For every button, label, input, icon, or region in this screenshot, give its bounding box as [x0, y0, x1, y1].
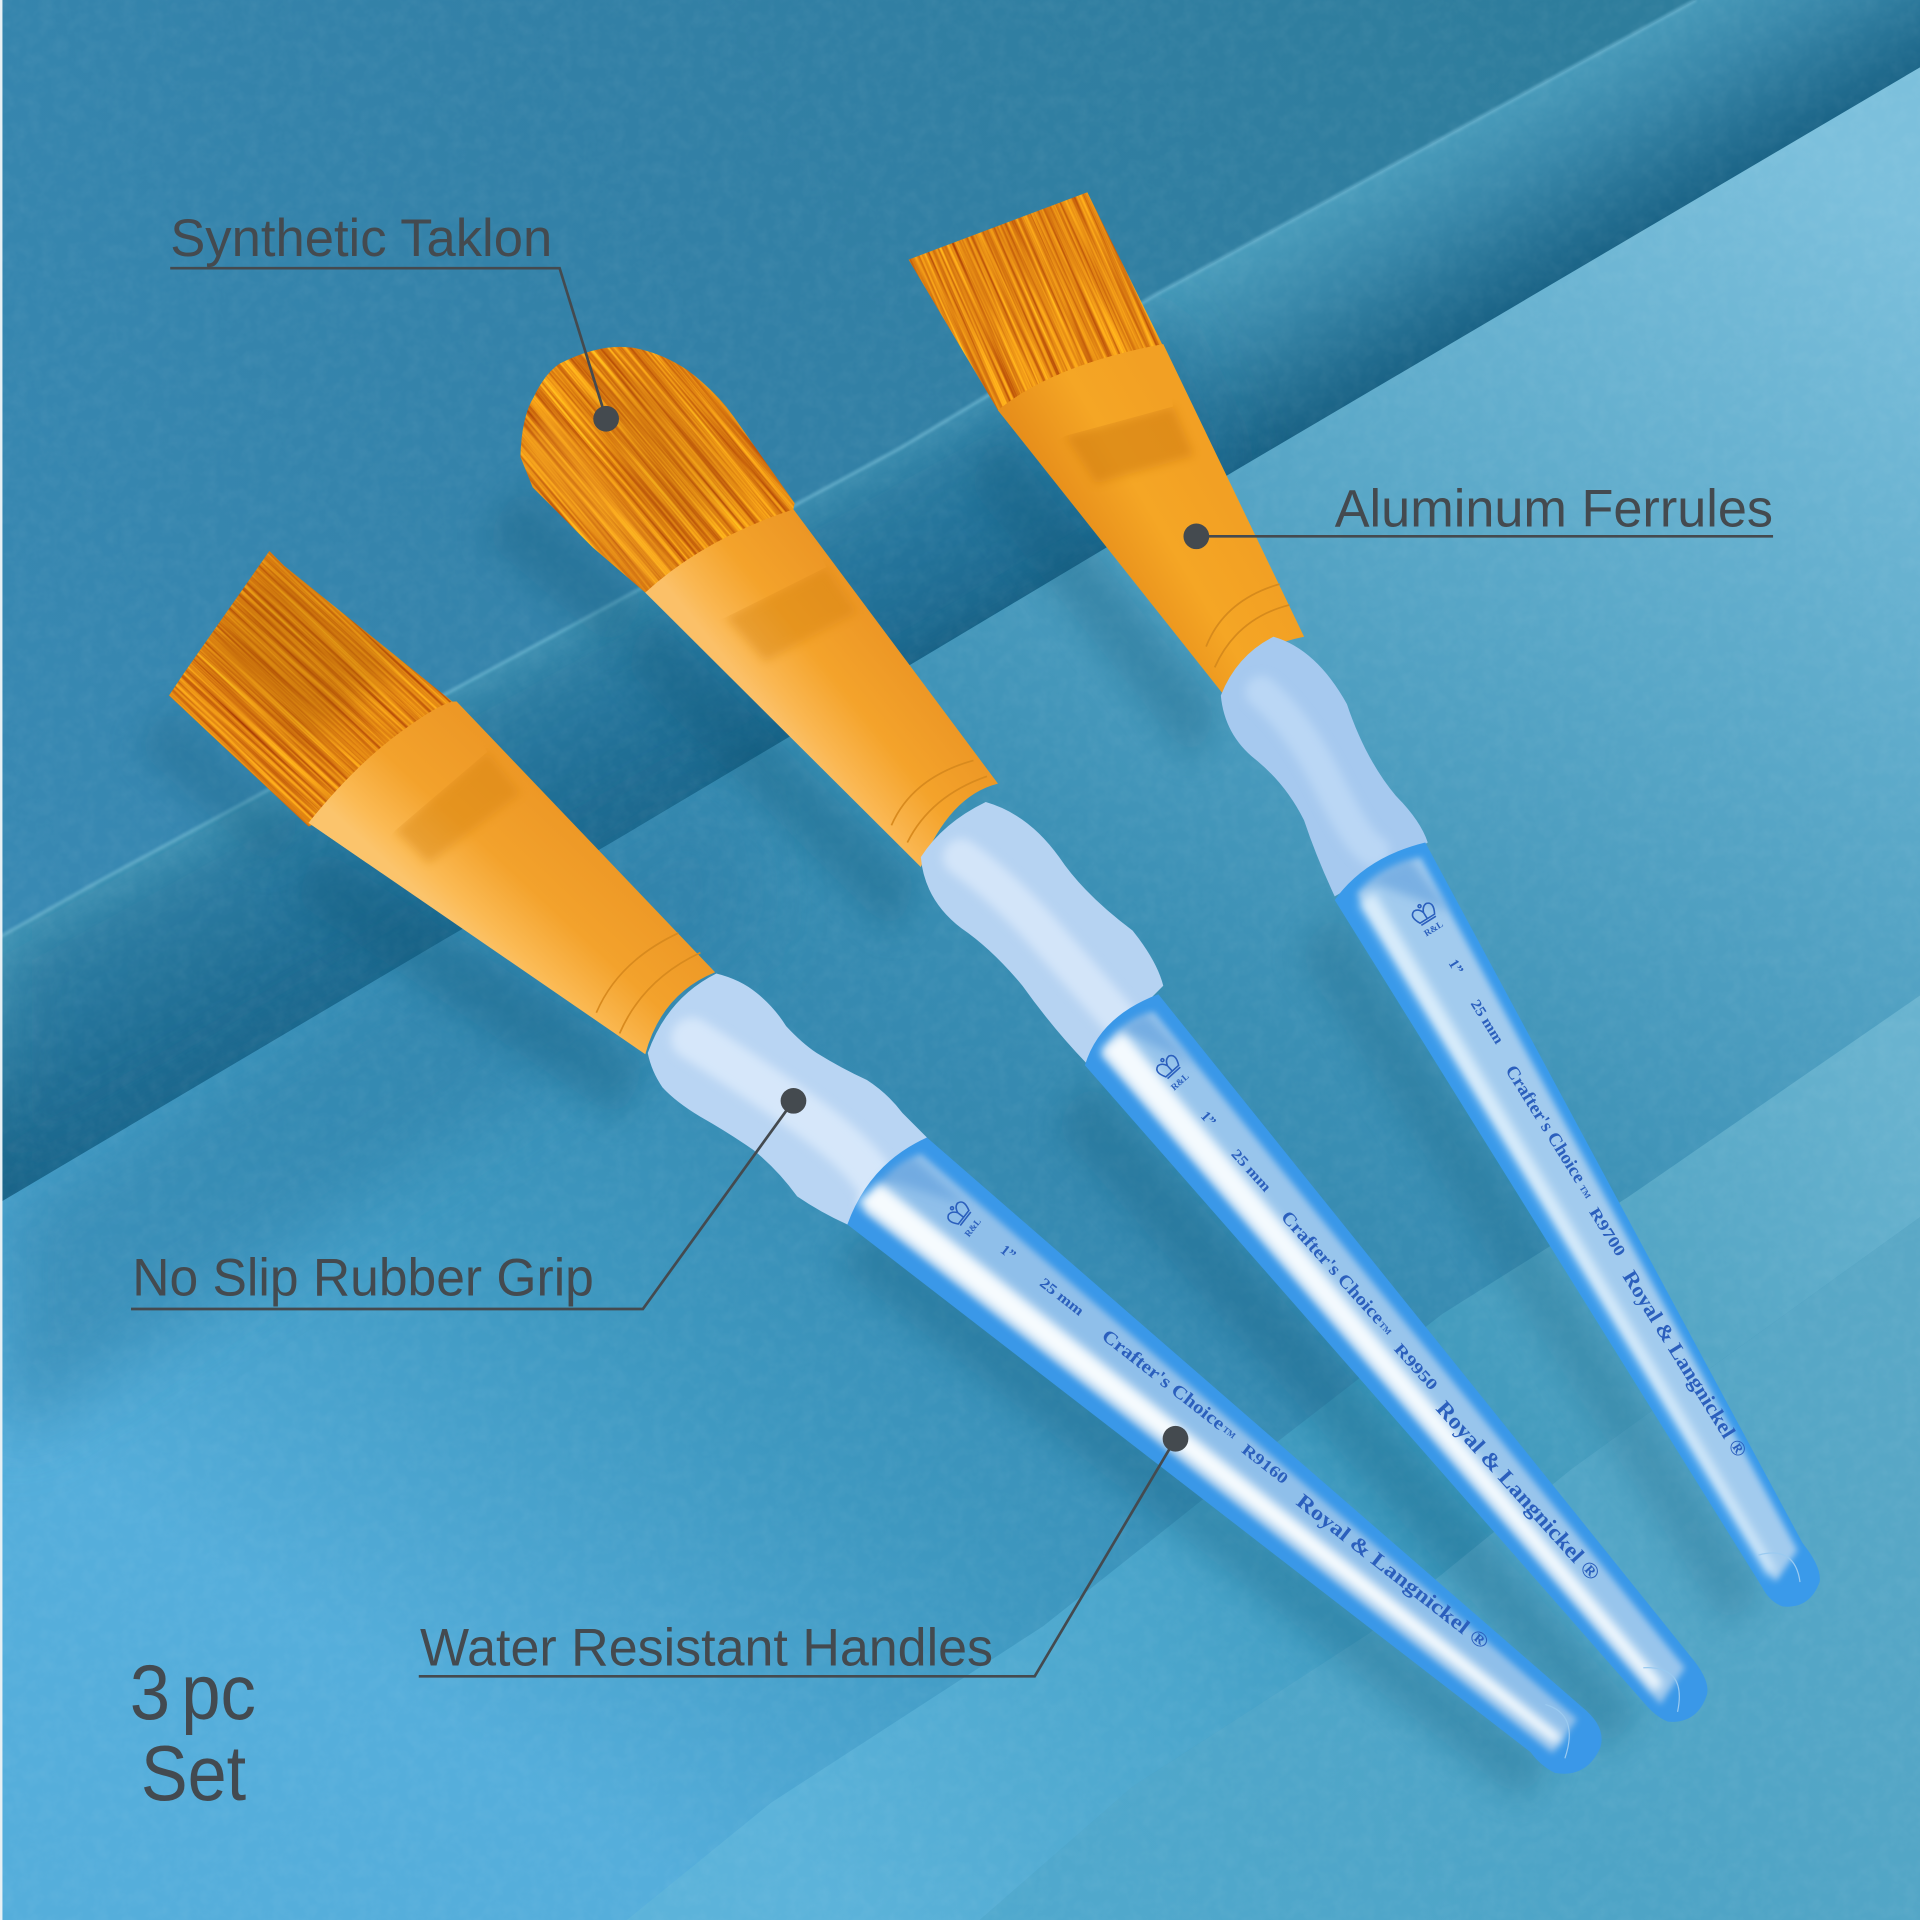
- handle lettering: R&L: [1169, 1071, 1191, 1092]
- ferrule: [309, 701, 715, 1054]
- callout: Synthetic Taklon: Synthetic Taklon: [170, 209, 552, 268]
- callout: Aluminum Ferrules: Aluminum Ferrules: [1335, 480, 1773, 539]
- brush 3: angled flat brush: [800, 46, 1820, 1607]
- rubber grip: [648, 973, 927, 1224]
- handle lettering: 1”: [997, 1242, 1019, 1264]
- bristles: [520, 346, 795, 593]
- callout: No Slip Rubber Grip: [131, 1088, 806, 1309]
- handle lettering: 25 mm: [1036, 1275, 1087, 1320]
- set size label: pc: [181, 1648, 256, 1736]
- rubber grip: [921, 802, 1163, 1063]
- handle lettering: R9160: [1238, 1441, 1291, 1488]
- handle lettering: Royal & Langnickel ®: [1618, 1266, 1752, 1461]
- handle lettering: 1”: [1445, 957, 1466, 978]
- callout: No Slip Rubber Grip: No Slip Rubber Grip: [132, 1249, 594, 1308]
- brush shadows: [135, 429, 1763, 1800]
- brush 1: left flat brush: [0, 375, 1602, 1774]
- handle lettering: R9700: [1585, 1205, 1628, 1260]
- ferrule: [998, 344, 1304, 694]
- lower step band: [627, 996, 1920, 1920]
- handle lettering: Crafter's Choice: [1098, 1325, 1229, 1434]
- shadowed step face: [0, 0, 1920, 1224]
- callout: Water Resistant Handles: [419, 1426, 1188, 1677]
- callout: Aluminum Ferrules: [1183, 480, 1773, 549]
- handle lettering: 1”: [1197, 1109, 1219, 1130]
- handle lettering: Crafter's Choice: [1277, 1207, 1389, 1328]
- handle lettering: Crafter's Choice: [1502, 1062, 1590, 1186]
- handle lettering: R&L: [963, 1217, 983, 1239]
- handle lettering: R9950: [1390, 1341, 1441, 1394]
- rubber grip: [1221, 637, 1428, 896]
- bristles: [908, 192, 1162, 410]
- handle lettering: [944, 1198, 1494, 1654]
- bristles: [169, 551, 453, 826]
- handle lettering: 25 mm: [1228, 1146, 1274, 1195]
- ferrule: [645, 509, 998, 867]
- handle: [847, 1138, 1602, 1774]
- set size label: 3: [130, 1648, 170, 1736]
- handle lettering: [1409, 899, 1752, 1461]
- handle lettering: Royal & Langnickel ®: [1292, 1489, 1494, 1654]
- lowest plane: [980, 1217, 1920, 1920]
- handle lettering: TM: [1377, 1320, 1394, 1337]
- handle lettering: Royal & Langnickel ®: [1431, 1396, 1606, 1585]
- handle: [1085, 994, 1707, 1722]
- white left margin: [0, 0, 2, 1920]
- handle lettering: TM: [1577, 1183, 1593, 1200]
- handle: [1335, 842, 1820, 1607]
- set size label: Set: [141, 1729, 246, 1817]
- step highlight edge: [0, 0, 1696, 937]
- brush 2: oval brush: [520, 192, 1775, 1722]
- handle lettering: [1153, 1051, 1606, 1585]
- handle lettering: 25 mm: [1467, 997, 1506, 1047]
- callout: Water Resistant Handles: Water Resistant Handles: [420, 1618, 993, 1677]
- handle lettering: TM: [1221, 1424, 1238, 1441]
- callout: Synthetic Taklon: [170, 209, 619, 432]
- set size label: [130, 1648, 256, 1817]
- handle lettering: R&L: [1422, 919, 1445, 938]
